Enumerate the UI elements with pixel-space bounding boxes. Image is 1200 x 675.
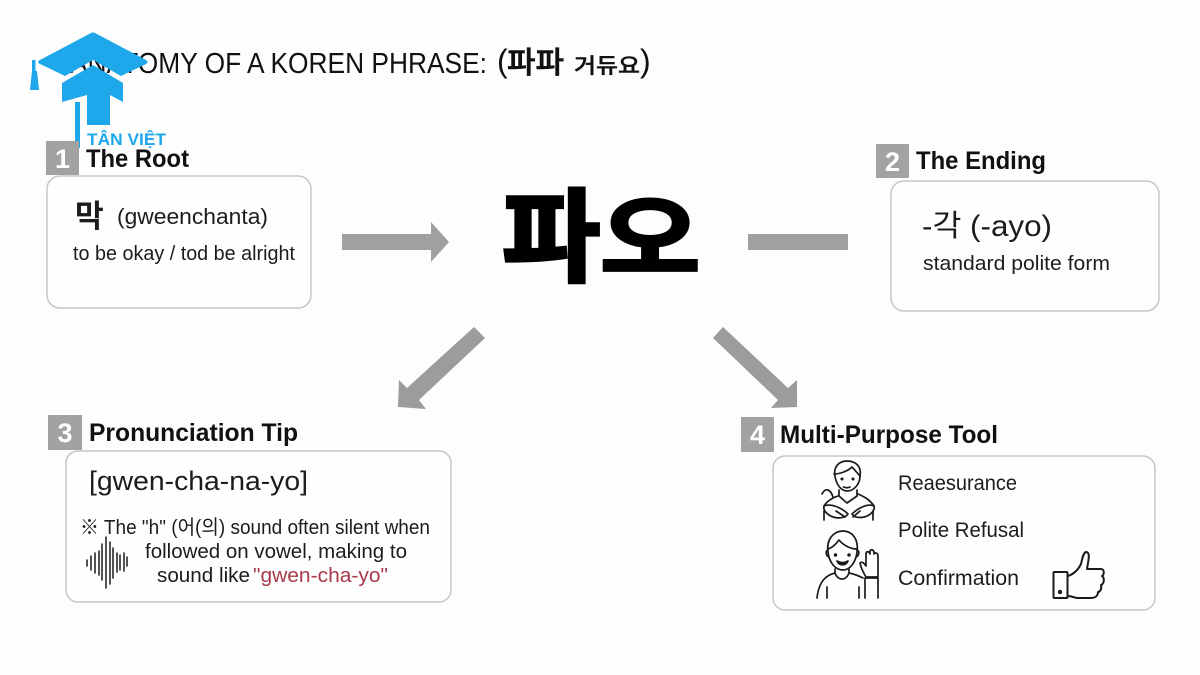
card 2 bbox=[891, 181, 1159, 311]
logo: Tan Viet graduation cap and arrow: TÂN VIỆT bbox=[87, 130, 166, 149]
root word: 막 bbox=[75, 191, 104, 236]
central Korean word: 파 bbox=[502, 157, 600, 304]
ending meaning: standard polite form bbox=[923, 253, 1110, 275]
arrow: centre to multi-purpose tool bbox=[713, 327, 797, 408]
arrow: centre to pronunciation tip bbox=[398, 327, 485, 409]
title: ANATOMY OF A KOREN PHRASE: bbox=[70, 48, 487, 80]
heading: The Ending: The Ending bbox=[916, 147, 1046, 175]
title: 파파 bbox=[507, 38, 564, 82]
logo: Tan Viet graduation cap and arrow bbox=[30, 32, 166, 149]
icon: sound wave bbox=[87, 537, 127, 588]
card 1 bbox=[47, 176, 311, 308]
romanization: (gweenchanta) bbox=[117, 204, 268, 229]
pronunciation note: ※ The "h" (어(의) sound often silent when bbox=[80, 516, 430, 539]
badge 4 bbox=[741, 417, 774, 452]
badge 1 bbox=[46, 141, 79, 175]
badge 2 bbox=[876, 144, 909, 178]
badge 2: 2 bbox=[885, 147, 900, 177]
title: ) bbox=[640, 43, 651, 79]
panel 4: Multi-Purpose Tool bbox=[741, 417, 1155, 610]
use case: Polite Refusal: Polite Refusal bbox=[898, 519, 1024, 542]
arrow: root to centre bbox=[342, 222, 449, 262]
central Korean word: 오 bbox=[600, 166, 700, 299]
icon: thumbs up bbox=[1054, 552, 1104, 598]
root meaning: to be okay / tod be alright bbox=[73, 243, 295, 265]
pronunciation note: "gwen-cha-yo" bbox=[253, 565, 388, 587]
title bbox=[70, 38, 651, 82]
phonetic spelling: [gwen-cha-na-yo] bbox=[89, 466, 308, 496]
card 3 bbox=[66, 451, 451, 602]
central Korean word bbox=[502, 157, 700, 304]
badge 3 bbox=[48, 415, 82, 450]
title: 거듀요 bbox=[574, 50, 640, 80]
heading: The Root: The Root bbox=[86, 145, 190, 173]
ending syllable: -각 (-ayo) bbox=[922, 210, 1052, 243]
heading: Pronunciation Tip: Pronunciation Tip bbox=[89, 419, 298, 447]
pronunciation note: sound like bbox=[157, 565, 250, 587]
icon: person with hands on chest bbox=[822, 461, 874, 520]
title: ( bbox=[497, 43, 508, 79]
badge 1: 1 bbox=[55, 144, 70, 174]
pronunciation note bbox=[80, 516, 430, 587]
panel 2: The Ending bbox=[876, 144, 1159, 311]
panel 3: Pronunciation Tip bbox=[48, 415, 451, 602]
icon: person waving bbox=[817, 531, 878, 598]
badge 3: 3 bbox=[57, 418, 73, 448]
card 4 bbox=[773, 456, 1155, 610]
use case: Confirmation: Confirmation bbox=[898, 567, 1019, 590]
heading: Multi-Purpose Tool: Multi-Purpose Tool bbox=[780, 421, 998, 449]
pronunciation note: followed on vowel, making to bbox=[145, 541, 407, 563]
badge 4: 4 bbox=[750, 420, 765, 450]
use case: Reassurance: Reaesurance bbox=[898, 472, 1017, 495]
connector bar: centre to ending bbox=[748, 234, 848, 250]
panel 1: The Root bbox=[46, 141, 311, 308]
